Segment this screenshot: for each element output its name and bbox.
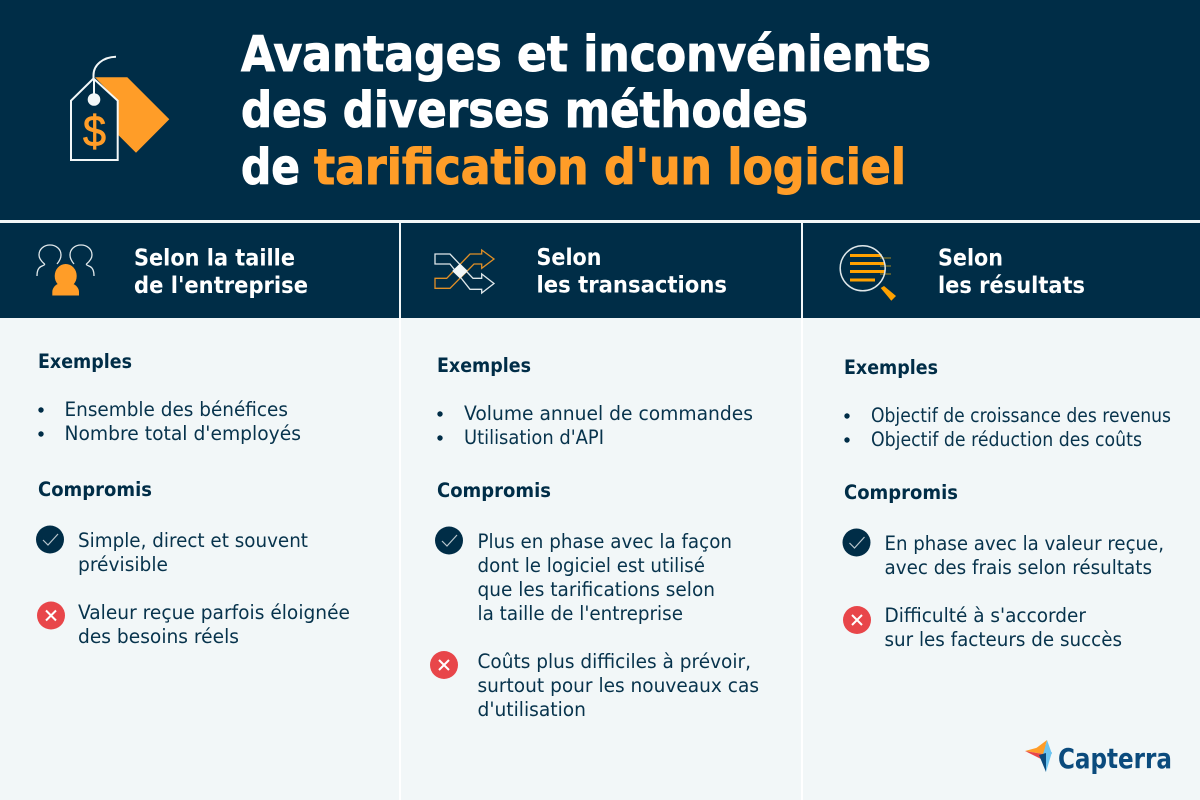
column dividers bbox=[399, 223, 803, 318]
trade-offs: la taille de l'entreprise bbox=[478, 602, 683, 625]
logo: Capterra: Capterra bbox=[1058, 742, 1172, 775]
icon: cross bbox=[843, 606, 871, 634]
logo: Capterra bbox=[1025, 740, 1172, 775]
trade-offs: prévisible bbox=[78, 553, 168, 576]
trade-offs: sur les facteurs de succès bbox=[884, 628, 1122, 651]
trade-offs: Valeur reçue parfois éloignée bbox=[78, 601, 350, 624]
icon: price tag bbox=[71, 57, 169, 160]
trade-offs: que les tarifications selon bbox=[478, 578, 715, 601]
title: de bbox=[241, 139, 300, 196]
examples: Utilisation d'API bbox=[464, 426, 604, 449]
examples: Exemples bbox=[437, 354, 531, 377]
header band bbox=[0, 0, 1200, 220]
icon: check bbox=[36, 526, 64, 554]
trade-offs: des besoins réels bbox=[78, 625, 239, 648]
heading bbox=[536, 245, 727, 298]
heading: Selon la taille bbox=[134, 246, 295, 272]
title bbox=[241, 26, 931, 196]
icon: check bbox=[842, 528, 870, 556]
examples bbox=[38, 350, 301, 445]
trade-offs: En phase avec la valeur reçue, bbox=[884, 532, 1164, 555]
heading bbox=[134, 246, 308, 299]
trade-offs: Compromis bbox=[38, 478, 152, 501]
heading: de l'entreprise bbox=[134, 273, 308, 299]
trade-offs bbox=[430, 479, 759, 721]
trade-offs: dont le logiciel est utilisé bbox=[478, 554, 705, 577]
heading: Selon bbox=[938, 246, 1003, 272]
icon: magnifier bbox=[840, 246, 896, 301]
trade-offs: surtout pour les nouveaux cas bbox=[478, 674, 759, 697]
icon: cross bbox=[430, 651, 458, 679]
examples: Objectif de réduction des coûts bbox=[871, 428, 1142, 451]
examples: Volume annuel de commandes bbox=[464, 402, 753, 425]
column header band bbox=[0, 223, 1200, 318]
examples bbox=[437, 354, 753, 449]
trade-offs: Compromis bbox=[437, 479, 551, 502]
examples: Ensemble des bénéfices bbox=[64, 398, 288, 421]
trade-offs bbox=[36, 478, 350, 648]
heading: Selon bbox=[536, 245, 602, 271]
icon: check bbox=[435, 526, 463, 554]
title: Avantages et inconvénients bbox=[241, 26, 931, 83]
examples: Exemples bbox=[844, 356, 938, 379]
icon: people bbox=[37, 245, 94, 296]
icon: shuffle arrows bbox=[435, 250, 494, 293]
heading: les résultats bbox=[938, 273, 1085, 299]
title: tarification d'un logiciel bbox=[314, 139, 906, 196]
panel: selon les transactions bbox=[430, 245, 759, 721]
icon: price tag: $ bbox=[83, 107, 106, 156]
trade-offs: Compromis bbox=[844, 481, 958, 504]
panel: selon la taille bbox=[36, 245, 350, 648]
trade-offs bbox=[842, 481, 1164, 651]
panel: selon les résultats bbox=[840, 246, 1171, 651]
trade-offs: Simple, direct et souvent bbox=[78, 529, 308, 552]
trade-offs: Plus en phase avec la façon bbox=[478, 530, 732, 553]
trade-offs: Difficulté à s'accorder bbox=[884, 604, 1087, 627]
examples: Exemples bbox=[38, 350, 132, 373]
heading: les transactions bbox=[536, 272, 727, 298]
trade-offs: Coûts plus difficiles à prévoir, bbox=[478, 650, 751, 673]
trade-offs: d'utilisation bbox=[478, 698, 586, 721]
examples bbox=[844, 356, 1171, 451]
icon: cross bbox=[37, 602, 65, 630]
examples: Nombre total d'employés bbox=[64, 422, 301, 445]
heading bbox=[938, 246, 1085, 299]
trade-offs: avec des frais selon résultats bbox=[884, 556, 1152, 579]
white rule under title bbox=[0, 220, 1200, 223]
title: des diverses méthodes bbox=[241, 82, 808, 139]
